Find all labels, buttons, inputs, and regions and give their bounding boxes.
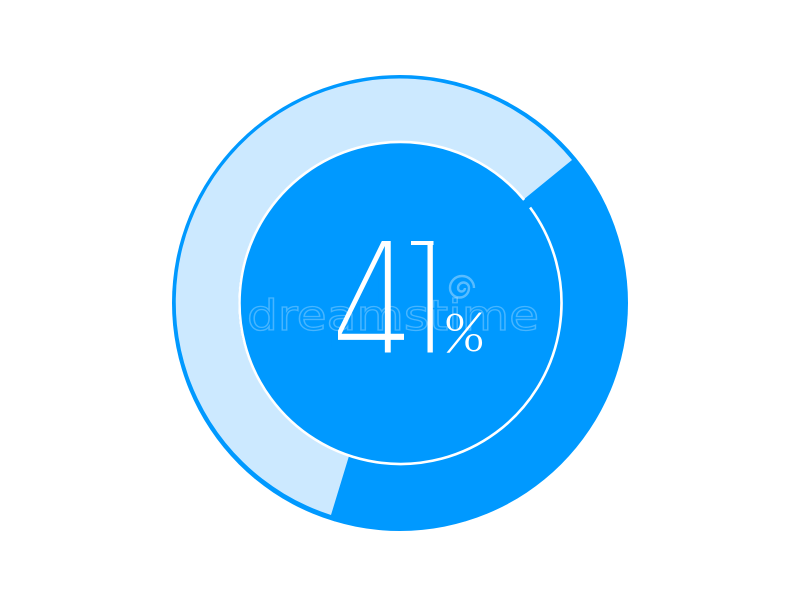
percent sign: % bbox=[443, 311, 485, 356]
watermark spiral logo bbox=[450, 276, 474, 298]
digit 4: 4 bbox=[331, 212, 411, 413]
flag of digit 1 bbox=[411, 241, 434, 245]
digit 1: 1 bbox=[387, 213, 467, 389]
donut base circle bbox=[172, 75, 628, 531]
light remaining arc segment bbox=[176, 79, 572, 515]
value label: 41% bbox=[338, 241, 482, 353]
panel: percentage donut chart bbox=[172, 75, 628, 531]
watermark bbox=[247, 276, 539, 340]
inner white ring bbox=[175, 78, 626, 528]
watermark wordmark: dreamstime bbox=[247, 291, 539, 340]
